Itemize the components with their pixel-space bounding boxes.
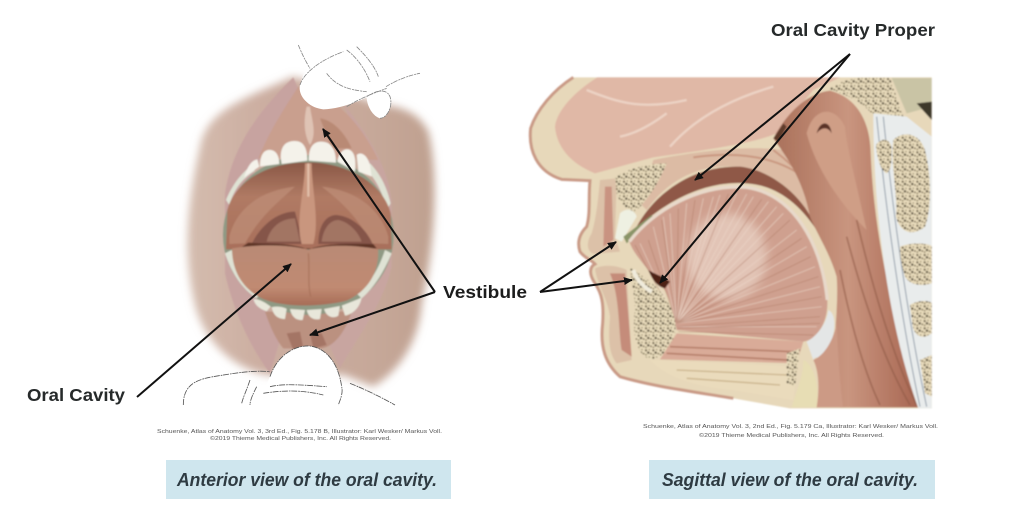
credit: sagittal illustration: ©2019 Thieme Medical Publishers, Inc. All Rights Reserved. [699,432,884,439]
pharynx [773,91,923,407]
caption: sagittal view: Sagittal view of the oral cavity. [662,470,918,490]
soft palate and uvula [299,163,316,244]
illustration: anterior view of open mouth [183,45,434,407]
caption: anterior view: Anterior view of the oral cavity. [176,470,437,490]
upper gum [258,87,378,160]
tongue [629,187,827,342]
facial skin [188,77,434,387]
arrows: vestibule sagittal view [540,242,632,292]
credit: sagittal illustration: Schuenke, Atlas of Anatomy Vol. 3, 2nd Ed., Fig. 5.179 Ca, Illustrator: Karl Wesker/ Markus Voll. [643,424,938,430]
label: vestibule: Vestibule [443,282,527,302]
face and fat layer [530,77,932,408]
skull base bone [828,78,903,120]
hyoid and neck [787,348,800,387]
throat and tonsils [252,212,373,244]
upper finger [298,45,420,118]
spine soft tissue [873,113,932,408]
lower finger [183,346,395,407]
sublingual cavity [648,270,670,288]
nasal cavity [555,77,840,173]
floor of mouth [660,333,803,363]
tongue muscle fibres [640,193,822,327]
credit: anterior illustration: ©2019 Thieme Medical Publishers, Inc. All Rights Reserved. [210,435,391,442]
lower teeth [253,297,362,320]
mandible [630,267,675,359]
palate [226,162,392,249]
label: oral cavity proper: Oral Cavity Proper [771,20,935,40]
upper lip and maxilla soft tissue [588,178,620,254]
hard palate and soft palate [640,148,838,237]
tongue [232,245,378,305]
label: oral cavity: Oral Cavity [27,385,125,405]
lower lip and chin soft tissue [595,266,632,363]
lower gum [265,312,352,348]
arrows: oral cavity proper [660,54,850,283]
skin edge [530,77,733,398]
illustration: sagittal view of head [530,77,932,408]
upper teeth [244,141,372,177]
oral cavity proper space [635,167,817,230]
arrow: oral cavity [137,264,291,397]
caption: sagittal view [649,460,935,499]
arrows: vestibule anterior view [310,129,435,335]
vertebrae [876,134,932,397]
caption: anterior view [166,460,451,499]
credit: anterior illustration [157,429,442,442]
mouth opening with molars [223,155,394,315]
credit: anterior illustration: Schuenke, Atlas of Anatomy Vol. 3, 3rd Ed., Fig. 5.178 B, Illustrator: Karl Wesker/ Markus Voll. [157,429,442,435]
maxilla bone [615,163,667,213]
credit: sagittal illustration [643,424,938,439]
inner lip strips [225,77,300,373]
